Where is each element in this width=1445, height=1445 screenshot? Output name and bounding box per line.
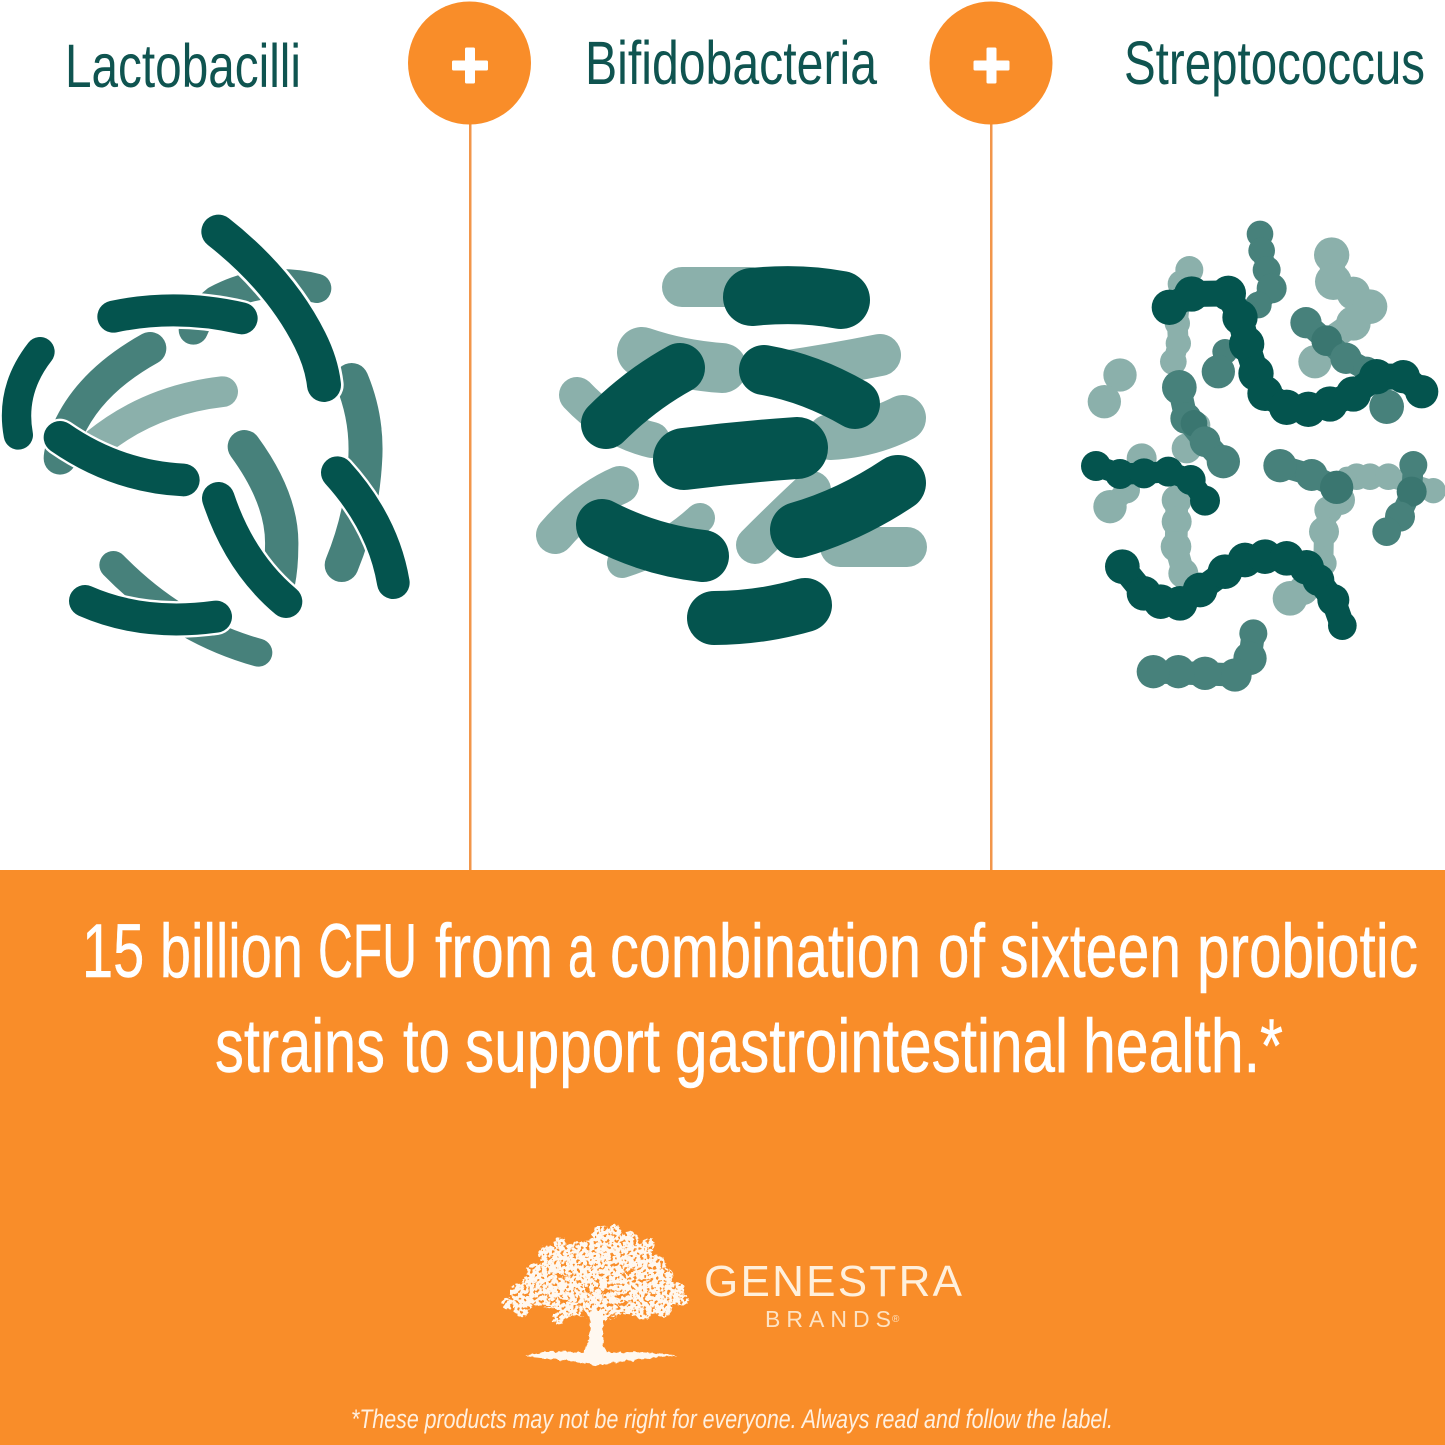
heading: Lactobacilli: Lactobacilli [65, 32, 301, 100]
main statement: CFU [318, 909, 417, 994]
branch gaps [537, 1269, 653, 1322]
light chains [1088, 237, 1445, 616]
main statement: combination [610, 909, 921, 994]
registered mark: ® [892, 1314, 900, 1325]
heading: Bifidobacteria: Bifidobacteria [585, 29, 877, 97]
wordmark: GENESTRA: GENESTRA [704, 1257, 963, 1306]
main statement: from [435, 909, 553, 994]
main statement: a [568, 909, 595, 994]
icon: first plus badge [408, 2, 531, 124]
main statement: support [465, 1004, 660, 1089]
icon: oak tree [502, 1225, 689, 1366]
tree trunk and ground [525, 1310, 677, 1366]
dark chains [1081, 276, 1438, 640]
illustration: streptococcus chains [1081, 221, 1445, 692]
main statement: of [938, 909, 986, 994]
medium chains [1137, 221, 1427, 692]
main statement [82, 909, 1418, 1089]
tree canopy [502, 1225, 689, 1324]
main statement: gastrointestinal [675, 1004, 1068, 1089]
connector line: second plus to panel [990, 120, 992, 870]
main statement: strains [215, 1004, 385, 1089]
illustration: lactobacilli rods [17, 232, 393, 653]
main statement: 15 billion [82, 909, 303, 994]
main statement: to [403, 1004, 450, 1089]
connector line: first plus to panel [469, 120, 472, 870]
disclaimer: *These products may not be right for everyone. Always read and follow the label. [351, 1404, 1113, 1434]
logo: Genestra Brands tree and wordmark [502, 1225, 963, 1366]
main statement: sixteen [1000, 909, 1181, 994]
main statement: health.* [1083, 1004, 1283, 1089]
illustration: bifidobacteria rods [555, 287, 907, 618]
wordmark: BRANDS: BRANDS [765, 1306, 891, 1332]
icon: second plus badge [930, 2, 1052, 124]
orange footer panel [0, 870, 1445, 1445]
